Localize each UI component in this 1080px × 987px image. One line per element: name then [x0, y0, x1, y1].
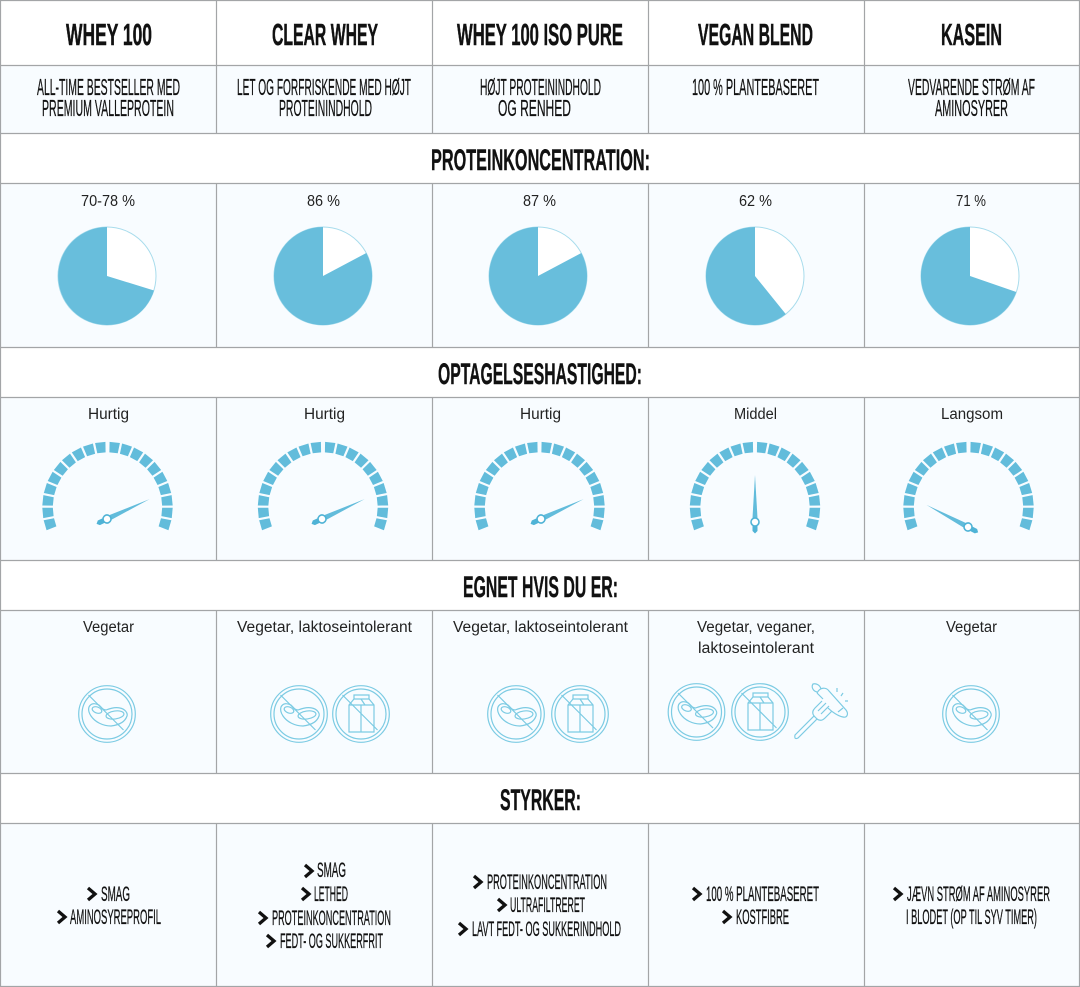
- icon: no meat, whey 100: [79, 686, 135, 742]
- strengths: vegan blend: KOSTFIBRE: [736, 905, 789, 929]
- speed labels: Hurtig: [520, 406, 561, 423]
- text: FEDT- OG SUKKERFRIT: [280, 929, 383, 953]
- product titles: VEGAN BLEND: [698, 17, 813, 52]
- icon: carrot on fork: [795, 684, 848, 739]
- product titles: [66, 17, 1002, 52]
- product descriptions: HØJT PROTEININDHOLD: [480, 74, 601, 100]
- gauge: vegan blend: [690, 442, 820, 534]
- suitability labels: Vegetar: [946, 619, 997, 636]
- speed labels: Hurtig: [88, 406, 129, 423]
- suitability labels: Vegetar: [83, 619, 134, 636]
- gauge: kasein: [903, 442, 1034, 536]
- product descriptions: OG RENHED: [498, 95, 571, 121]
- heading: egnet hvis du er: EGNET HVIS DU ER:: [463, 571, 618, 604]
- product descriptions: ALL-TIME BESTSELLER MED: [37, 74, 180, 100]
- text: LAVT FEDT- OG SUKKERINDHOLD: [472, 917, 621, 941]
- product descriptions: [37, 74, 1035, 121]
- protein percentages: 62 %: [739, 193, 772, 210]
- suitability labels: Vegetar, laktoseintolerant: [237, 619, 413, 636]
- strengths: clear whey: LETHED: [314, 882, 348, 906]
- heading: styrker: STYRKER:: [500, 784, 581, 817]
- icons: clear whey: [271, 686, 389, 742]
- text: AMINOSYREPROFIL: [70, 905, 161, 929]
- strengths: whey 100: [58, 882, 161, 929]
- product titles: WHEY 100 ISO PURE: [457, 17, 623, 52]
- product titles: CLEAR WHEY: [272, 17, 378, 52]
- product descriptions: PROTEININDHOLD: [279, 95, 372, 121]
- protein percentages: 71 %: [956, 193, 986, 210]
- strengths: iso pure: ULTRAFILTRERET: [510, 893, 585, 917]
- protein percentages: [81, 193, 986, 210]
- strengths: clear whey: SMAG: [317, 858, 346, 882]
- gauge: whey 100: [42, 442, 173, 530]
- product descriptions: 100 % PLANTEBASERET: [692, 74, 819, 100]
- gauge: iso pure: [474, 442, 605, 530]
- text: PROTEINKONCENTRATION: [272, 906, 391, 930]
- heading: optagelseshastighed: OPTAGELSESHASTIGHED:: [438, 358, 642, 391]
- strengths: kasein: [894, 882, 1050, 929]
- suitability labels: [83, 619, 997, 657]
- strengths: clear whey: [259, 858, 391, 953]
- product descriptions: LET OG FORFRISKENDE MED HØJT: [237, 74, 411, 100]
- speed labels: [88, 406, 1003, 423]
- strengths: vegan blend: [693, 882, 819, 929]
- pie charts: [58, 227, 1019, 325]
- icon: no meat, kasein: [943, 686, 999, 742]
- protein percentages: 70-78 %: [81, 193, 135, 210]
- suitability labels: Vegetar, veganer,: [697, 619, 815, 636]
- protein percentages: 87 %: [523, 193, 556, 210]
- product descriptions: PREMIUM VALLEPROTEIN: [42, 95, 174, 121]
- text: PROTEINKONCENTRATION: [487, 870, 607, 894]
- icons: iso pure: [488, 686, 608, 742]
- gauge: clear whey: [258, 442, 388, 530]
- protein percentages: 86 %: [307, 193, 340, 210]
- speed labels: Middel: [734, 406, 777, 423]
- heading: proteinkoncentration: PROTEINKONCENTRATION:: [431, 144, 650, 177]
- strengths: iso pure: [459, 870, 621, 941]
- product titles: WHEY 100: [66, 17, 152, 52]
- text: 100 % PLANTEBASERET: [706, 882, 819, 906]
- speed labels: Langsom: [941, 406, 1003, 423]
- strengths: whey 100: SMAG: [101, 882, 130, 906]
- speed labels: Hurtig: [304, 406, 345, 423]
- suitability labels: laktoseintolerant: [698, 640, 815, 657]
- suitability labels: Vegetar, laktoseintolerant: [453, 619, 629, 636]
- product titles: KASEIN: [941, 17, 1002, 52]
- icons: vegan blend: [668, 684, 848, 740]
